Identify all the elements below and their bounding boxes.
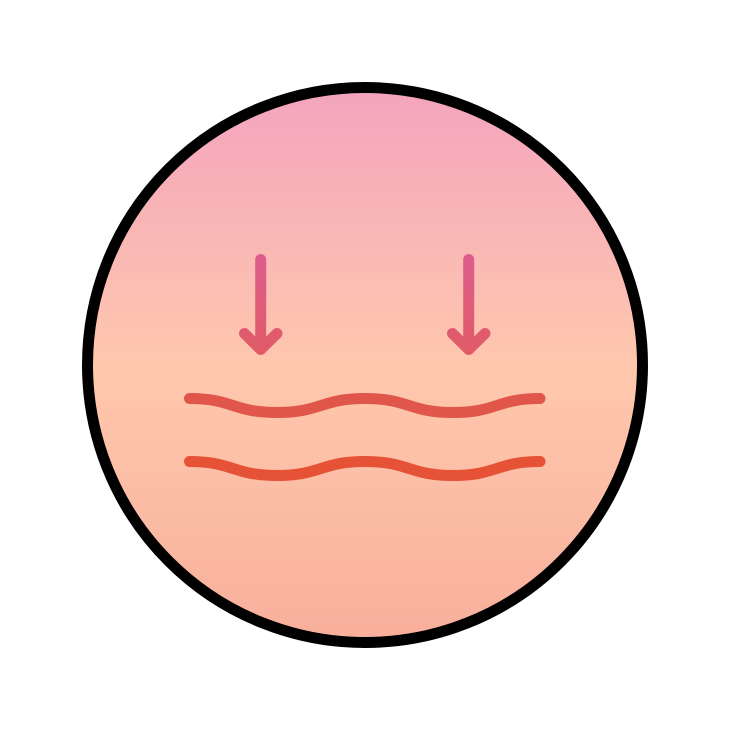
circle badge [88, 88, 642, 642]
icon: left down arrow [244, 260, 277, 350]
lower wavy line [190, 462, 540, 476]
icon: right down arrow [452, 260, 485, 350]
upper wavy line [190, 398, 540, 412]
